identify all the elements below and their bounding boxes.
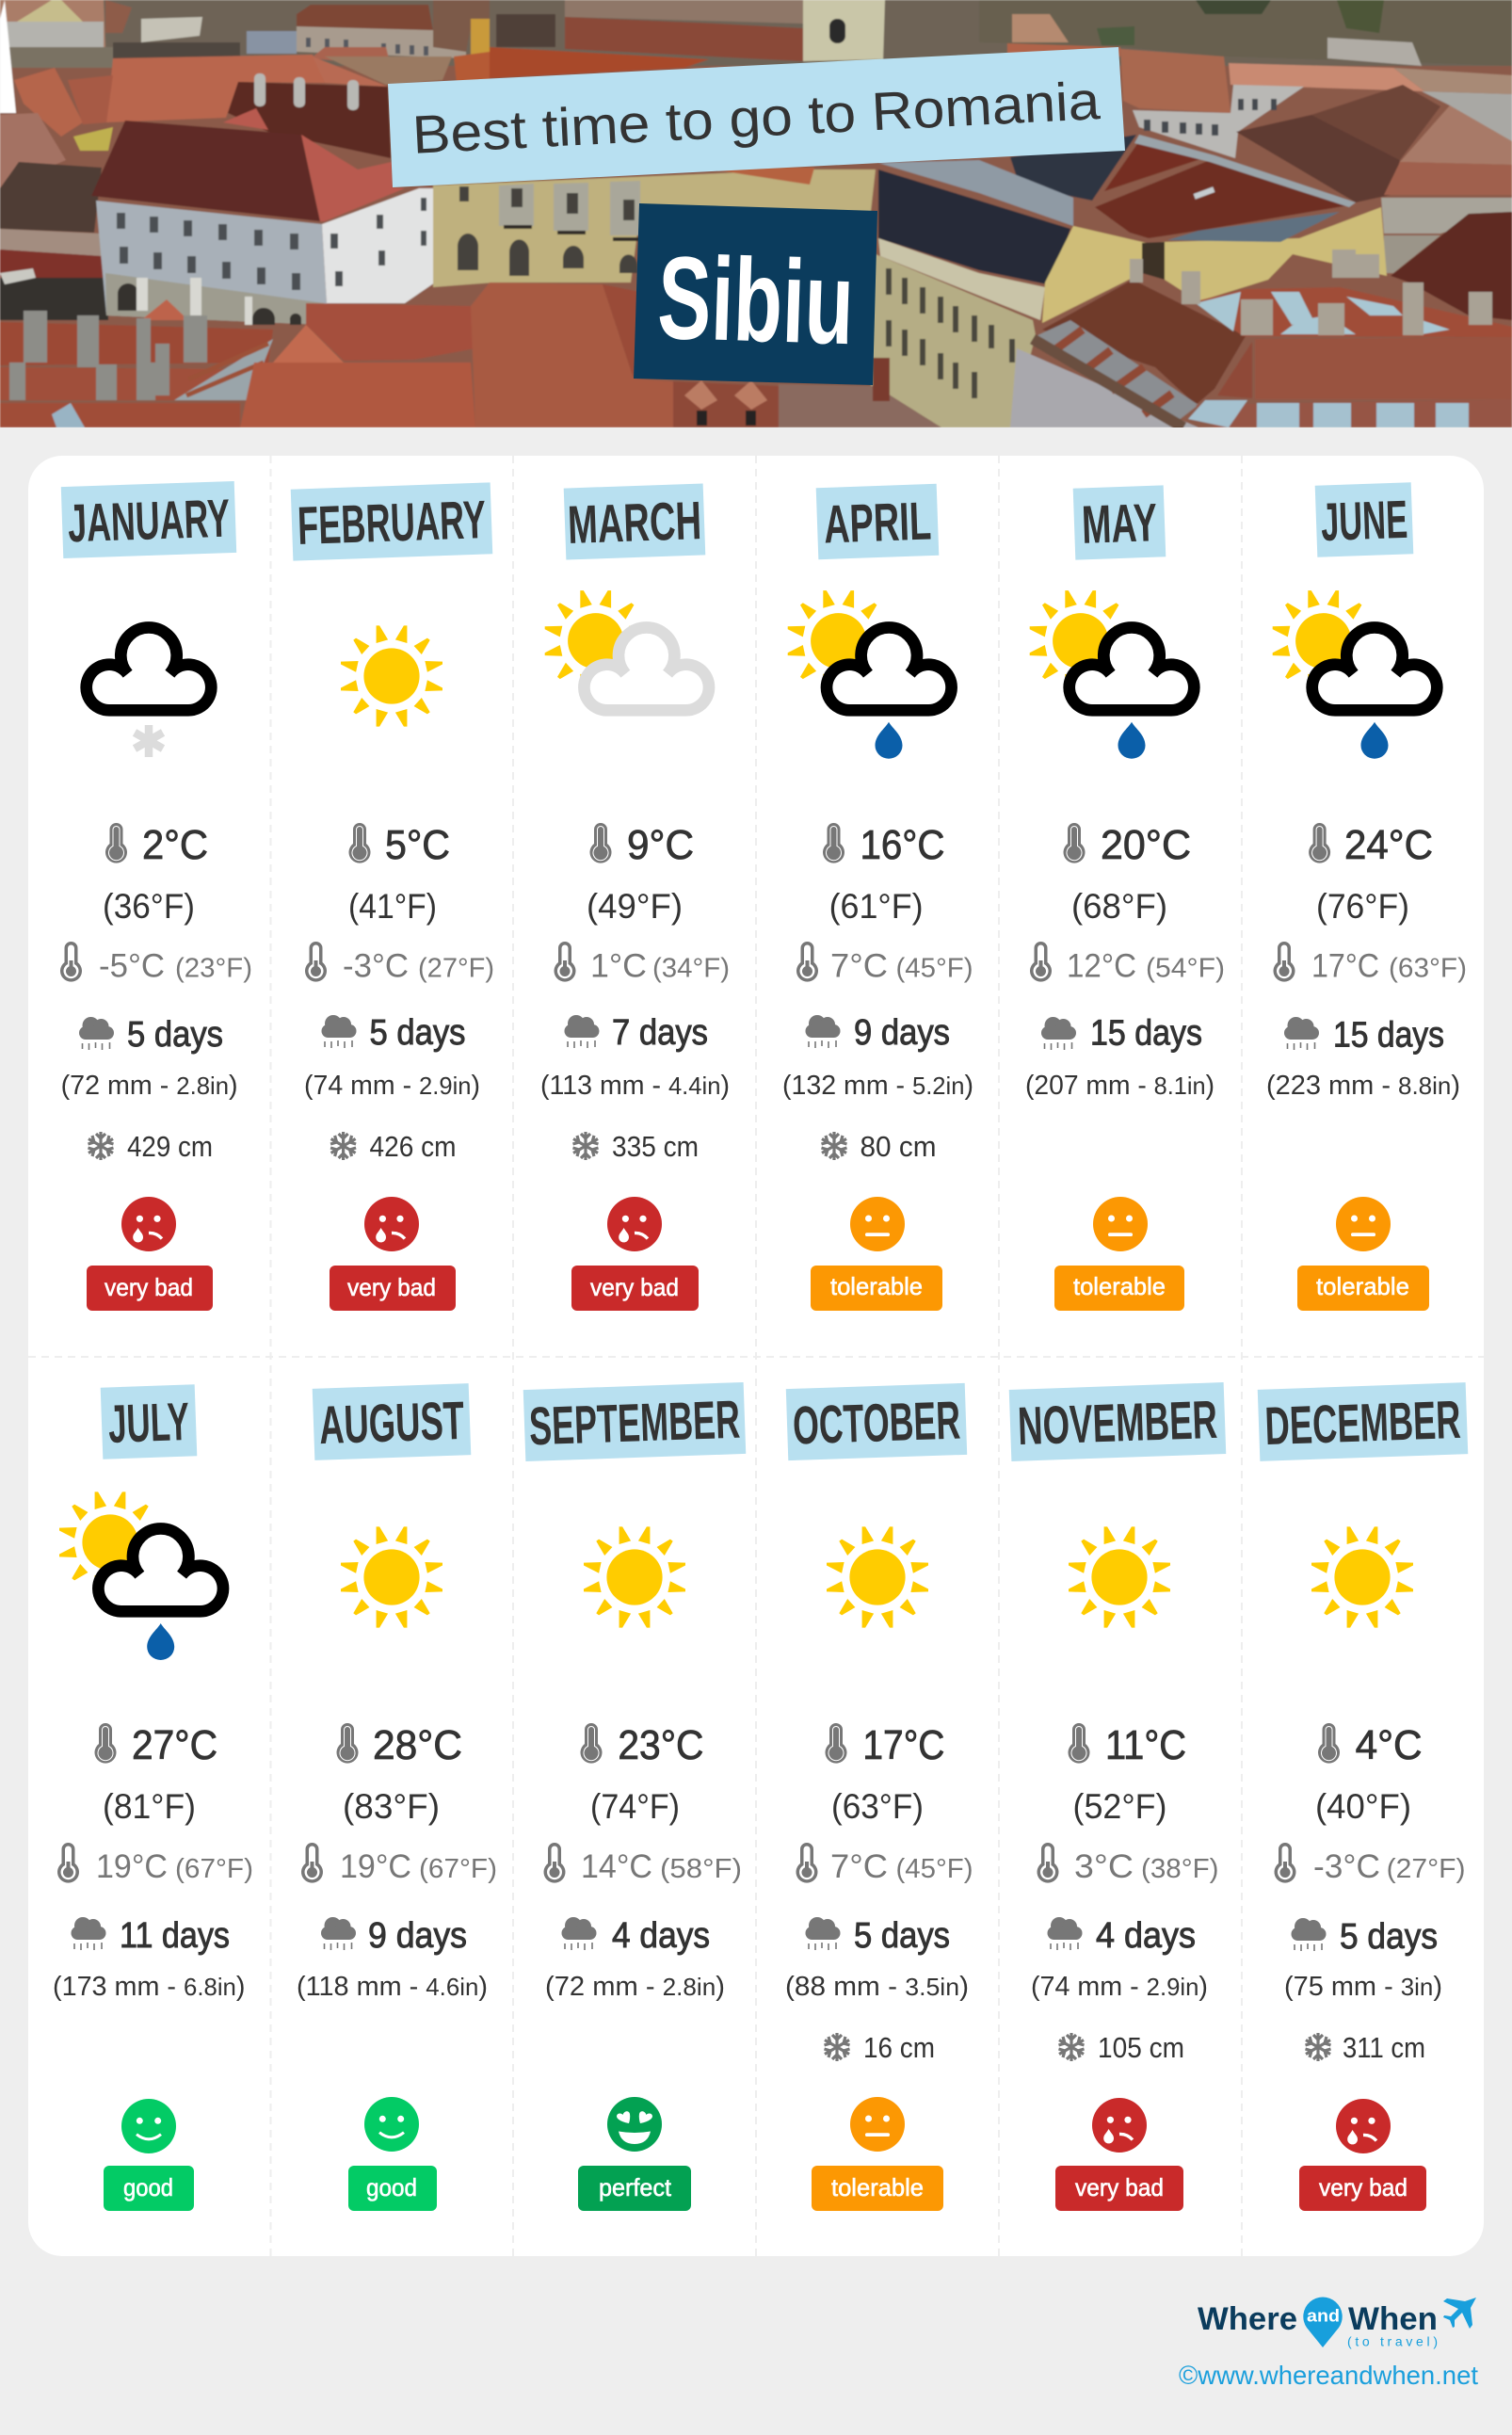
icon: sun: [341, 1526, 442, 1628]
icon: sun: [827, 1526, 928, 1628]
logo: Where and When (to travel): and: [1307, 2307, 1340, 2326]
snowfall: [88, 1130, 213, 1163]
icon: cloud with snow: [87, 627, 211, 757]
heading: February: [291, 482, 492, 561]
high temperature: [589, 822, 694, 868]
month: September: [523, 1382, 746, 2211]
high temperature fahrenheit: (63°F): [831, 1787, 924, 1826]
heading: March: [564, 483, 705, 560]
month: December: [1258, 1382, 1468, 2211]
month: June: [1266, 482, 1467, 1311]
heading: November: [1009, 1382, 1226, 1461]
high temperature: [580, 1722, 703, 1768]
rainfall: (74 mm - 2.9in): [1031, 1972, 1208, 2002]
high temperature: 20°C: [1101, 822, 1191, 868]
city banner: Sibiu: Sibiu: [656, 233, 856, 369]
rating: very bad: very bad: [1319, 2173, 1407, 2201]
snowfall: [1058, 2031, 1184, 2064]
logo: Where and When (to travel): [1198, 2297, 1476, 2349]
rating: perfect: [578, 2097, 691, 2211]
high temperature fahrenheit: (49°F): [587, 887, 683, 926]
icon: sun, cloud and rain drop: [59, 1492, 223, 1660]
month: January: [60, 481, 252, 1311]
low temperature: (34°F): [652, 953, 730, 983]
snowfall: 429 cm: [127, 1130, 213, 1163]
rainy days: 15 days: [1333, 1016, 1444, 1056]
heading: March: MARCH: [567, 491, 702, 556]
high temperature: [1318, 1722, 1423, 1768]
logo: Where and When (to travel): (to travel): [1347, 2334, 1438, 2349]
rating: very bad: [571, 1197, 699, 1311]
icon: sun: [584, 1526, 685, 1628]
heading: June: [1315, 482, 1413, 557]
high temperature: 11°C: [1105, 1722, 1186, 1768]
rating: very bad: [330, 1197, 456, 1311]
snowfall: [572, 1130, 699, 1163]
low temperature: 14°C: [581, 1848, 652, 1885]
icon: sun: [1069, 1526, 1170, 1628]
snowfall: [330, 1130, 456, 1163]
rating: tolerable: tolerable: [1316, 1272, 1409, 1300]
high temperature: 2°C: [142, 822, 208, 868]
icon: sun, cloud and rain drop: [1030, 590, 1194, 759]
rating: perfect: perfect: [599, 2173, 672, 2201]
website credit: ©www.whereandwhen.net: [1179, 2361, 1478, 2390]
heading: February: FEBRUARY: [297, 490, 487, 556]
heading: May: MAY: [1081, 492, 1158, 556]
low temperature: 19°C: [96, 1848, 168, 1885]
rainy days: [1041, 1013, 1202, 1053]
rating: tolerable: [812, 2097, 943, 2211]
rainfall: (72 mm - 2.8in): [545, 1972, 725, 2002]
rainy days: [806, 1013, 950, 1053]
heading: April: [816, 484, 939, 559]
title banner: Best time to go to Romania: [388, 47, 1125, 187]
rating: good: [348, 2097, 437, 2211]
high temperature: [825, 1722, 944, 1768]
month: April: [782, 484, 973, 1311]
heading: January: JANUARY: [67, 489, 231, 554]
high temperature fahrenheit: (76°F): [1316, 887, 1409, 926]
low temperature: [60, 942, 252, 985]
month: November: [1009, 1382, 1226, 2211]
heading: November: NOVEMBER: [1017, 1390, 1218, 1457]
month: May: [1025, 485, 1225, 1311]
rating: good: good: [123, 2173, 173, 2201]
high temperature: [348, 822, 450, 868]
low temperature: [554, 942, 730, 985]
rainy days: 9 days: [854, 1013, 950, 1053]
low temperature: (67°F): [419, 1854, 497, 1884]
rating: very bad: very bad: [347, 1273, 436, 1301]
heading: January: [61, 481, 236, 558]
high temperature fahrenheit: (52°F): [1073, 1787, 1167, 1826]
rating: good: good: [366, 2173, 417, 2201]
heading: June: JUNE: [1320, 490, 1408, 553]
low temperature: 19°C: [340, 1848, 411, 1885]
rainy days: 15 days: [1090, 1013, 1202, 1053]
month: October: [785, 1383, 973, 2211]
low temperature: (45°F): [896, 953, 973, 983]
rainy days: [79, 1015, 223, 1055]
high temperature fahrenheit: (61°F): [829, 887, 924, 926]
high temperature: [94, 1722, 217, 1768]
low temperature: -3°C: [343, 947, 409, 985]
rainfall: (173 mm - 6.8in): [53, 1972, 245, 2002]
title banner: Best time to go to Romania: Best time to go to Romania: [410, 71, 1102, 166]
snowfall: 311 cm: [1343, 2031, 1425, 2064]
rainy days: 5 days: [127, 1015, 223, 1055]
rainfall: (72 mm - 2.8in): [61, 1071, 238, 1101]
rating: tolerable: tolerable: [1073, 1272, 1166, 1300]
rainy days: 5 days: [1340, 1917, 1438, 1957]
hero photo: rooftops of Sibiu: [0, 0, 1512, 427]
low temperature: [796, 942, 973, 985]
rainfall: (75 mm - 3in): [1284, 1972, 1442, 2002]
heading: July: JULY: [107, 1392, 190, 1455]
rainfall: (88 mm - 3.5in): [785, 1972, 969, 2002]
high temperature: [1068, 1722, 1186, 1768]
heading: September: SEPTEMBER: [528, 1390, 741, 1457]
high temperature: 27°C: [132, 1722, 217, 1768]
high temperature: 28°C: [373, 1722, 462, 1768]
icon: airplane: [1443, 2298, 1476, 2329]
city banner: Sibiu: [634, 203, 877, 385]
high temperature: [823, 822, 945, 868]
low temperature: (58°F): [660, 1854, 742, 1884]
rainy days: [806, 1916, 950, 1956]
icon: sun: [1311, 1526, 1413, 1628]
high temperature: 17°C: [862, 1722, 944, 1768]
high temperature: [337, 1722, 462, 1768]
low temperature: [544, 1843, 742, 1885]
rating: very bad: [87, 1197, 213, 1311]
rainy days: 5 days: [854, 1916, 950, 1956]
rainfall: (113 mm - 4.4in): [540, 1071, 730, 1101]
high temperature: 5°C: [385, 822, 450, 868]
low temperature: (45°F): [896, 1854, 973, 1884]
high temperature: 16°C: [861, 822, 945, 868]
low temperature: [57, 1843, 253, 1885]
high temperature fahrenheit: (36°F): [103, 887, 195, 926]
low temperature: 7°C: [830, 947, 888, 985]
month: July: [53, 1384, 253, 2211]
rainy days: [321, 1916, 467, 1956]
high temperature: 23°C: [618, 1722, 703, 1768]
low temperature: [1037, 1843, 1218, 1885]
rating: good: [104, 2099, 194, 2211]
low temperature: [1030, 942, 1225, 985]
high temperature fahrenheit: (41°F): [348, 887, 437, 926]
low temperature: 1°C: [590, 947, 647, 985]
rating: very bad: [1055, 2098, 1183, 2211]
high temperature: 4°C: [1356, 1722, 1423, 1768]
rainy days: [72, 1916, 230, 1956]
low temperature: (63°F): [1389, 953, 1467, 983]
rainy days: 4 days: [1096, 1916, 1196, 1956]
snowfall: [821, 1130, 936, 1163]
snowfall: 335 cm: [612, 1130, 699, 1163]
low temperature: [305, 942, 494, 985]
high temperature fahrenheit: (83°F): [343, 1787, 440, 1826]
rainfall: (132 mm - 5.2in): [782, 1071, 973, 1101]
heading: September: [523, 1382, 746, 1461]
rainy days: 4 days: [612, 1916, 710, 1956]
rating: tolerable: [1054, 1197, 1184, 1311]
low temperature: (27°F): [418, 953, 494, 983]
month: August: [297, 1383, 497, 2211]
heading: August: [313, 1383, 471, 1460]
heading: April: APRIL: [823, 492, 932, 555]
rainy days: 9 days: [368, 1916, 467, 1956]
rainy days: [565, 1013, 708, 1053]
rainy days: [1284, 1016, 1444, 1056]
high temperature fahrenheit: (74°F): [590, 1787, 680, 1826]
snowfall: 105 cm: [1098, 2031, 1184, 2064]
rating: tolerable: [1297, 1197, 1429, 1311]
rainfall: (223 mm - 8.8in): [1266, 1071, 1460, 1101]
low temperature: [1273, 942, 1467, 985]
rainy days: [322, 1013, 465, 1053]
rating: very bad: very bad: [105, 1273, 193, 1301]
snowfall: 80 cm: [861, 1130, 936, 1163]
rating: very bad: [1299, 2099, 1426, 2211]
low temperature: (23°F): [175, 953, 252, 983]
snowfall: [1305, 2031, 1425, 2064]
low temperature: -5°C: [99, 947, 165, 985]
month: March: [540, 483, 730, 1311]
high temperature fahrenheit: (81°F): [103, 1787, 196, 1826]
icon: sun behind light cloud: [545, 590, 709, 710]
high temperature: [1309, 822, 1433, 868]
snowfall: 16 cm: [863, 2031, 935, 2064]
high temperature: [1064, 822, 1191, 868]
low temperature: [796, 1843, 973, 1885]
low temperature: 7°C: [830, 1848, 888, 1885]
month: February: [291, 482, 494, 1311]
rainfall: (207 mm - 8.1in): [1025, 1071, 1214, 1101]
icon: sun, cloud and rain drop: [788, 590, 952, 759]
rating: tolerable: [811, 1197, 942, 1311]
high temperature: 9°C: [627, 822, 694, 868]
icon: sun, cloud and rain drop: [1273, 590, 1437, 759]
logo: Where and When (to travel): Where: [1198, 2301, 1297, 2337]
heading: October: [786, 1383, 967, 1460]
rating: very bad: very bad: [1075, 2173, 1164, 2201]
high temperature fahrenheit: (68°F): [1071, 887, 1167, 926]
snowfall: 426 cm: [369, 1130, 456, 1163]
low temperature: [1275, 1843, 1466, 1885]
rainfall: (74 mm - 2.9in): [304, 1071, 480, 1101]
low temperature: -3°C: [1313, 1848, 1380, 1885]
icon: sun: [341, 625, 442, 727]
rainy days: [1047, 1916, 1196, 1956]
rating: tolerable: tolerable: [830, 1272, 923, 1300]
icon: map pin: [1303, 2297, 1343, 2347]
low temperature: 12°C: [1067, 947, 1136, 985]
rainfall: (118 mm - 4.6in): [297, 1972, 488, 2002]
heading: August: AUGUST: [318, 1391, 465, 1456]
low temperature: 3°C: [1074, 1848, 1134, 1885]
high temperature fahrenheit: (40°F): [1315, 1787, 1411, 1826]
low temperature: (54°F): [1146, 953, 1225, 983]
snowfall: [825, 2031, 935, 2064]
panel: monthly climate card: [28, 456, 1484, 2256]
logo: Where and When (to travel): When: [1348, 2301, 1438, 2337]
low temperature: 17°C: [1311, 947, 1379, 985]
rainy days: 5 days: [369, 1013, 465, 1053]
rainy days: [561, 1916, 710, 1956]
rainy days: [1292, 1917, 1438, 1957]
high temperature: 24°C: [1344, 822, 1433, 868]
heading: October: OCTOBER: [792, 1391, 961, 1456]
rating: very bad: very bad: [590, 1273, 679, 1301]
high temperature: [105, 822, 208, 868]
rainy days: 7 days: [612, 1013, 708, 1053]
heading: July: [101, 1384, 197, 1459]
low temperature: (27°F): [1387, 1854, 1466, 1884]
low temperature: (38°F): [1141, 1854, 1218, 1884]
low temperature: [301, 1843, 497, 1885]
heading: May: [1073, 485, 1166, 560]
low temperature: (67°F): [175, 1854, 253, 1884]
rating: tolerable: tolerable: [831, 2173, 924, 2201]
rainy days: 11 days: [120, 1916, 230, 1956]
